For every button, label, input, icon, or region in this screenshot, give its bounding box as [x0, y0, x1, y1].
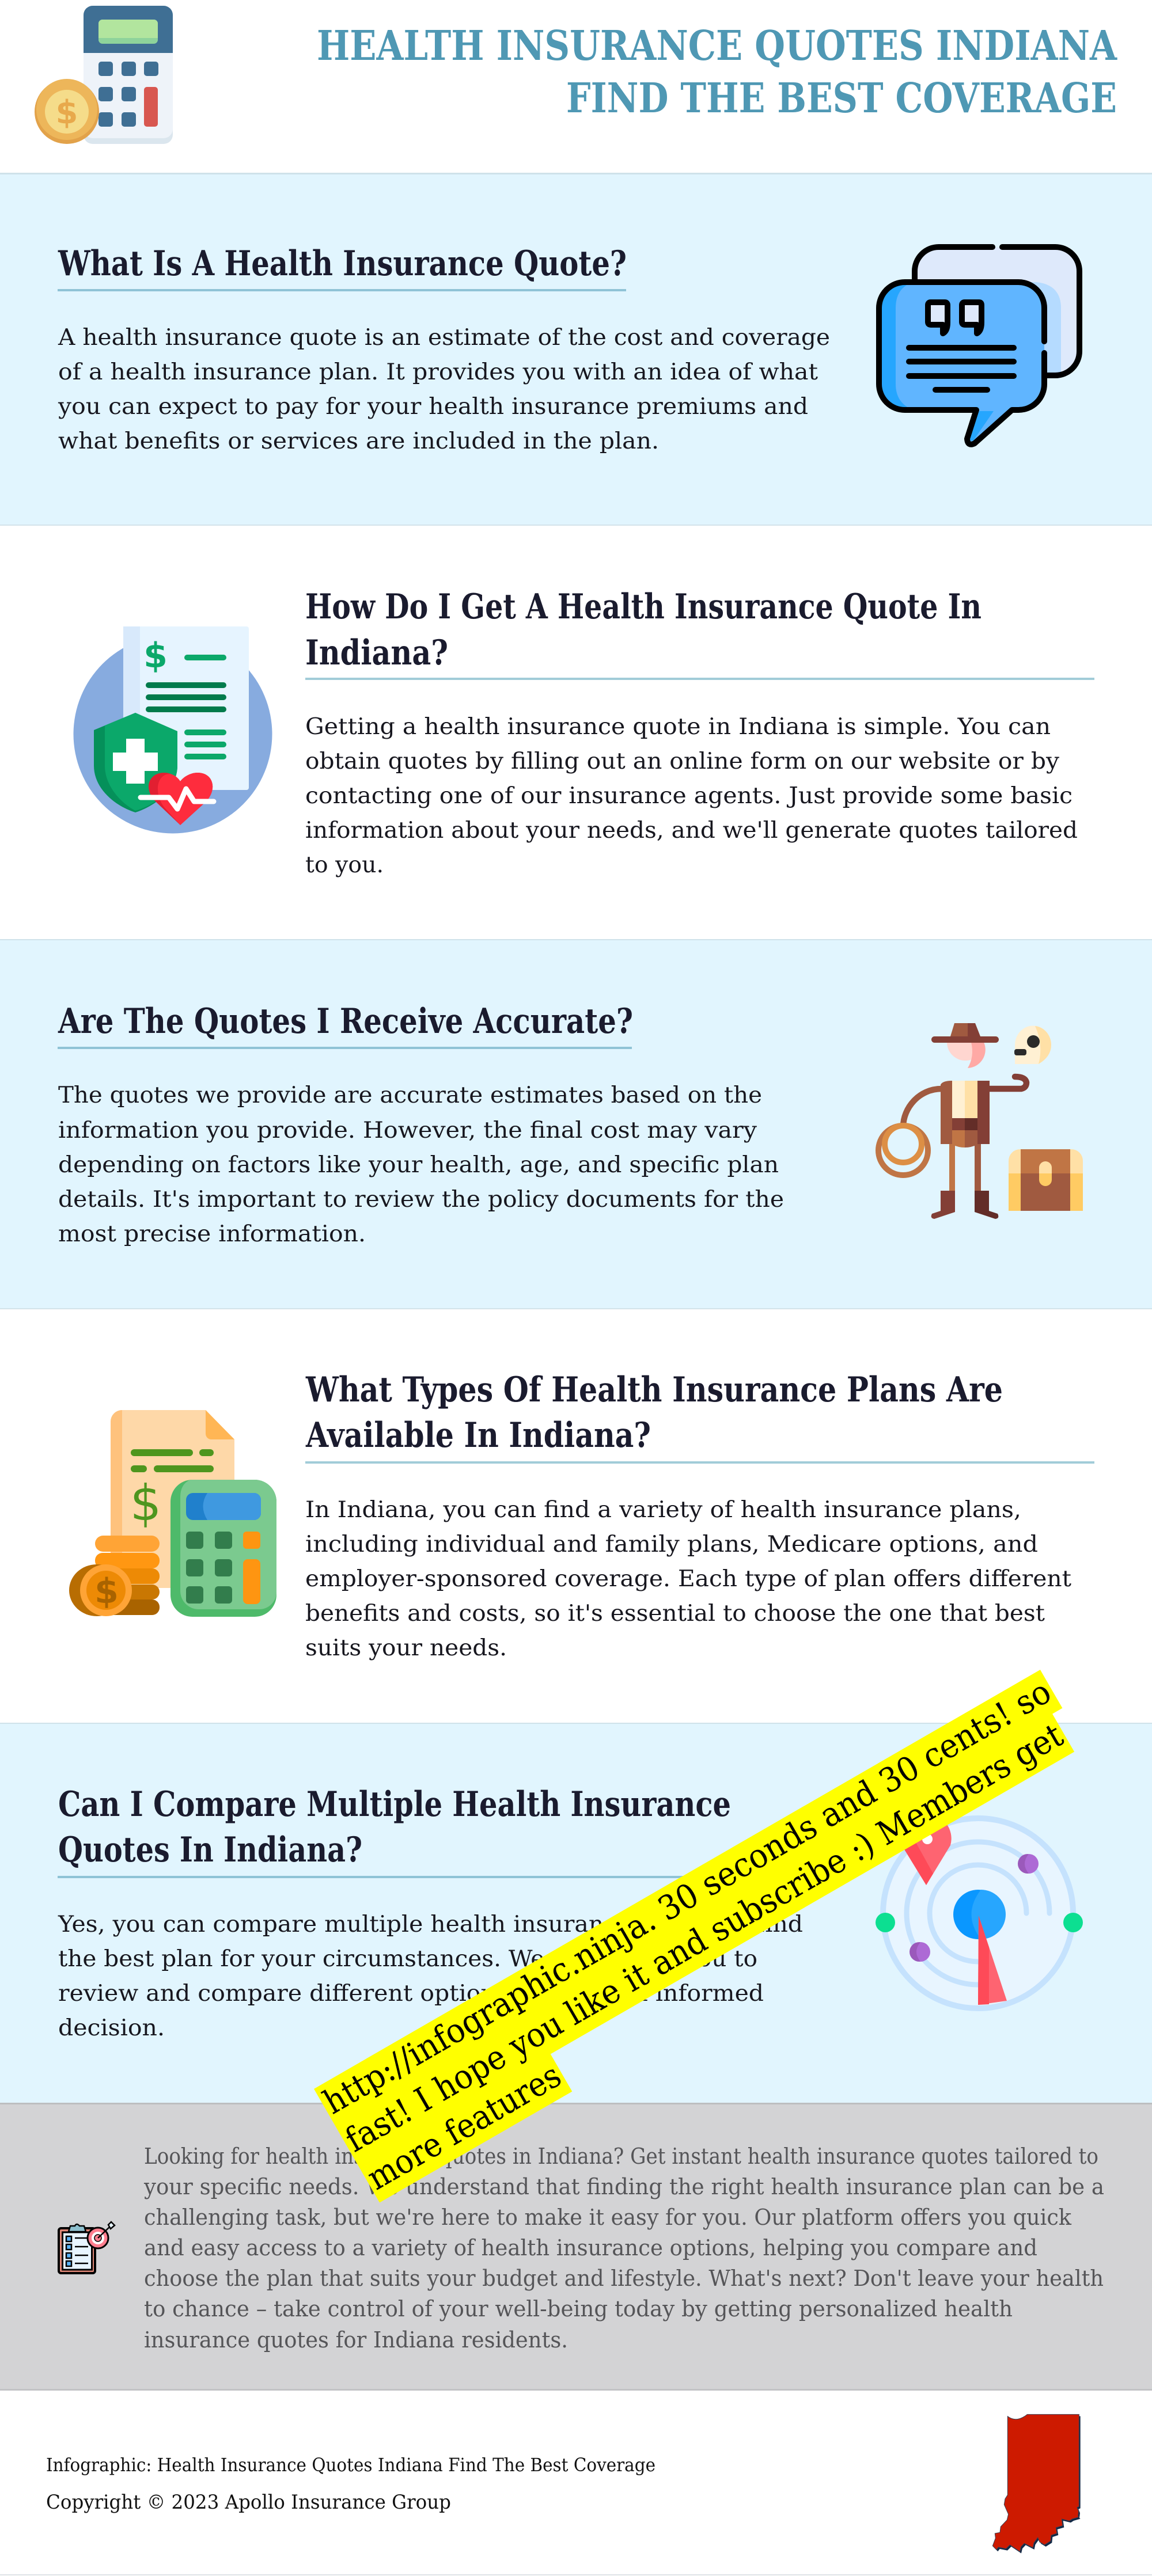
icon: bill, coins and calculator: $ — [94, 1571, 119, 1612]
panel: how do I get a quote — [74, 587, 1094, 878]
panel: what types of plans — [69, 1370, 1094, 1661]
icon: Indiana state map — [992, 2414, 1081, 2554]
heading — [305, 1370, 1094, 1464]
text block: benefits and costs, so it's essential to choose the one that best — [305, 1601, 1045, 1627]
copyright: Copyright © 2023 Apollo Insurance Group — [46, 2491, 451, 2514]
text block: to chance – take control of your well-being today by getting personalized health — [144, 2296, 1013, 2322]
icon: calculator and coin — [35, 6, 173, 144]
icon: speech bubbles — [879, 247, 1079, 444]
heading: Indiana? — [305, 633, 448, 673]
icon: bill, coins and calculator: $ — [130, 1475, 161, 1532]
banner: yellow diagonal promotional overlay: http://infographic.ninja. 30 seconds and 30 cents! so — [317, 1671, 1058, 2122]
text block — [58, 325, 830, 454]
text block — [58, 1082, 784, 1247]
text block: information about your needs, and we'll generate quotes tailored — [305, 818, 1078, 844]
header — [35, 6, 1117, 144]
panel: are the quotes accurate — [0, 939, 1152, 1309]
banner: yellow diagonal promotional overlay: more features — [361, 2056, 567, 2198]
text block: decision. — [58, 2015, 165, 2041]
icon: bill, coins and calculator — [69, 1410, 276, 1617]
text block: The quotes we provide are accurate estimates based on the — [58, 1082, 762, 1108]
text block: choose the plan that suits your budget and lifestyle. What's next? Don't leave your health — [144, 2266, 1104, 2291]
icon: clipboard with target — [59, 2222, 115, 2273]
icon: explorer with skull and treasure chest — [878, 1023, 1083, 1219]
text block — [305, 1497, 1071, 1661]
banner: yellow diagonal promotional overlay: fast! I hope you like it and subscribe :) Members get — [339, 1715, 1070, 2160]
footer — [0, 2414, 1152, 2575]
text block: and easy access to a variety of health insurance options, helping you compare and — [144, 2235, 1037, 2260]
heading: What Is A Health Insurance Quote? — [58, 244, 627, 284]
text block: Yes, you can compare multiple health insurance quotes to find — [58, 1912, 803, 1937]
text block: obtain quotes by filling out an online form on our website or by — [305, 749, 1059, 774]
text block: In Indiana, you can find a variety of health insurance plans, — [305, 1497, 1021, 1523]
text block — [143, 2144, 1104, 2353]
text block: Getting a health insurance quote in Indiana is simple. You can — [305, 714, 1051, 740]
icon: radar with location pin — [876, 1814, 1083, 2008]
text block — [305, 714, 1078, 878]
heading: Can I Compare Multiple Health Insurance — [58, 1784, 731, 1825]
text block: your specific needs. We understand that finding the right health insurance plan can be a — [143, 2174, 1104, 2199]
heading: What Types Of Health Insurance Plans Are — [305, 1370, 1003, 1410]
heading: Are The Quotes I Receive Accurate? — [58, 1001, 633, 1042]
text block: including individual and family plans, Medicare options, and — [305, 1532, 1038, 1557]
icon: insurance document, shield and heart — [74, 626, 272, 834]
text block: most precise information. — [58, 1221, 366, 1247]
panel: can I compare multiple quotes — [0, 1723, 1152, 2103]
text block: the best plan for your circumstances. We encourage you to — [58, 1946, 757, 1972]
heading: How Do I Get A Health Insurance Quote In — [305, 587, 982, 627]
text block: you can expect to pay for your health insurance premiums and — [58, 394, 808, 420]
source credit: Infographic: Health Insurance Quotes Indiana Find The Best Coverage — [46, 2454, 655, 2476]
icon: insurance document, shield and heart: $ — [143, 636, 168, 676]
text block: challenging task, but we're here to make it easy for you. Our platform offers you quick — [144, 2205, 1072, 2230]
title — [317, 21, 1117, 122]
text block: what benefits or services are included in the plan. — [58, 428, 659, 454]
text block: contacting one of our insurance agents. Just provide some basic — [305, 783, 1073, 809]
heading: Quotes In Indiana? — [58, 1830, 362, 1870]
text block: review and compare different options to make an informed — [58, 1981, 764, 2007]
text block: employer-sponsored coverage. Each type of plan offers different — [305, 1566, 1071, 1592]
text block: details. It's important to review the policy documents for the — [58, 1187, 784, 1213]
panel: closing summary — [0, 2103, 1152, 2391]
heading — [58, 1784, 732, 1878]
text block: of a health insurance plan. It provides you with an idea of what — [58, 359, 818, 385]
heading: Available In Indiana? — [305, 1415, 651, 1456]
text block: suits your needs. — [305, 1635, 507, 1661]
text block: insurance quotes for Indiana residents. — [144, 2327, 568, 2353]
text block: to you. — [305, 852, 384, 878]
heading — [305, 587, 1094, 680]
text block: information you provide. However, the final cost may vary — [58, 1118, 757, 1143]
panel: what is a health insurance quote — [0, 173, 1152, 526]
text block: A health insurance quote is an estimate of the cost and coverage — [58, 325, 830, 351]
icon: calculator and coin: $ — [56, 94, 78, 131]
text block — [58, 1912, 803, 2041]
text block: depending on factors like your health, age, and specific plan — [58, 1152, 779, 1178]
